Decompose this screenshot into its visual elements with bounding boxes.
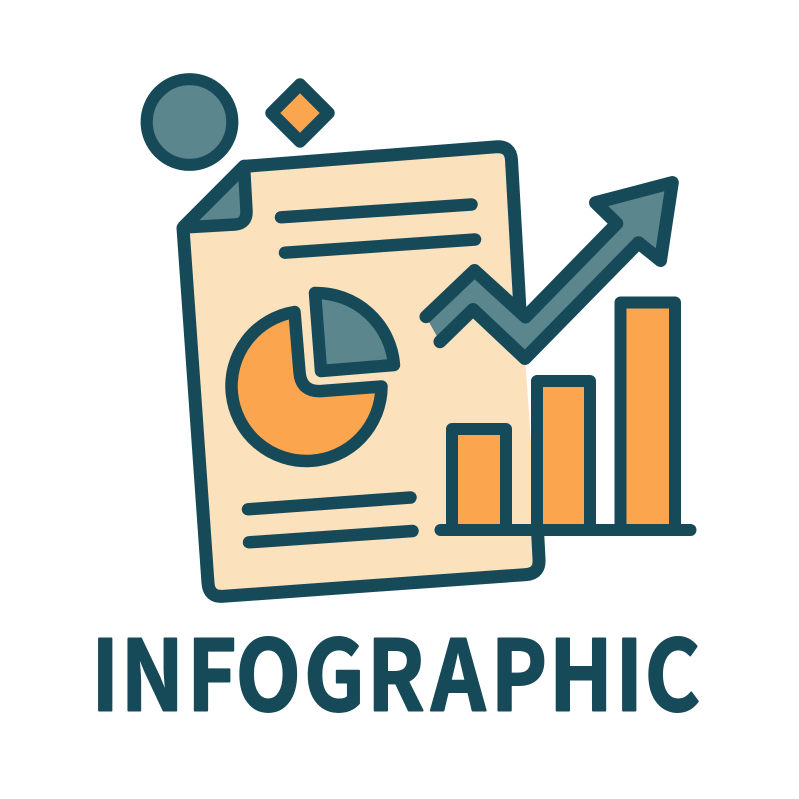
bar tall bbox=[620, 302, 675, 530]
icon: diamond bbox=[272, 84, 328, 142]
title: INFOGRAPHIC bbox=[91, 599, 700, 740]
text lines top bbox=[281, 204, 475, 253]
bar small bbox=[452, 429, 506, 530]
arrow outline bbox=[426, 182, 672, 358]
pie teal slice bbox=[315, 293, 394, 371]
arrow fill bbox=[426, 182, 672, 358]
pie chart bbox=[232, 293, 394, 461]
pie large orange slice bbox=[232, 312, 382, 461]
panel: document bbox=[183, 147, 539, 596]
bar medium bbox=[537, 381, 590, 530]
folded corner bbox=[183, 166, 247, 228]
axis bbox=[440, 524, 690, 536]
document outline lower bbox=[183, 228, 539, 596]
document outline upper bbox=[183, 147, 520, 310]
document page fill bbox=[183, 147, 539, 596]
text lines bottom bbox=[248, 498, 412, 542]
icon: circle bbox=[147, 79, 232, 165]
bar chart bbox=[440, 302, 690, 530]
arrow bbox=[426, 182, 672, 358]
